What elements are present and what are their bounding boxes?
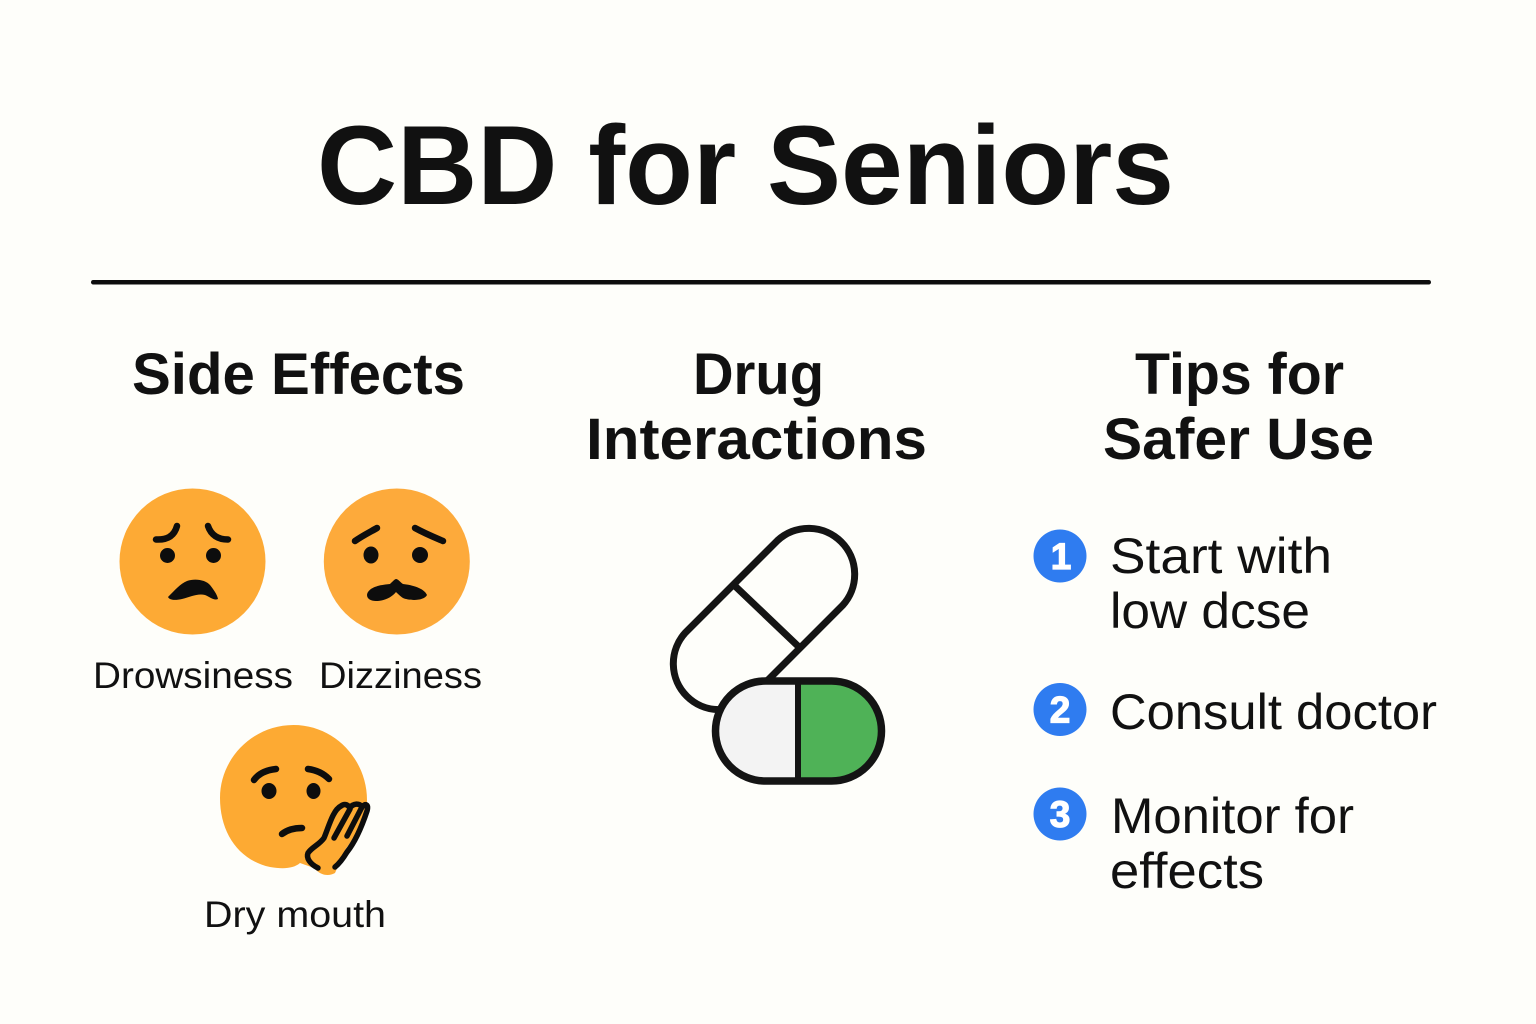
tip 3 badge xyxy=(1034,788,1086,840)
icon: green and white capsule xyxy=(716,680,882,782)
tip 2 text: Consult doctor xyxy=(1110,684,1437,740)
icon: dry mouth face with hand xyxy=(220,725,368,875)
tip 2 badge xyxy=(1034,683,1086,736)
panel: side effects xyxy=(93,342,482,935)
label: dizziness: Dizziness xyxy=(319,655,482,696)
tip 3 text: effects xyxy=(1110,843,1264,899)
icon: drowsiness face xyxy=(120,488,266,634)
tip 3 badge: 3 xyxy=(1050,794,1070,835)
tip 1 badge: 1 xyxy=(1051,536,1071,577)
icon: outlined capsule xyxy=(673,528,855,710)
label: drowsiness: Drowsiness xyxy=(93,655,293,696)
tip 3 text: Monitor for xyxy=(1111,788,1354,844)
tip 1 text: Start with xyxy=(1110,528,1332,584)
tip 2 badge: 2 xyxy=(1050,690,1070,730)
title: CBD for Seniors xyxy=(317,103,1174,228)
panel: tips for safer use xyxy=(1034,342,1437,899)
heading: tips for safer use: Tips for xyxy=(1135,342,1344,407)
label: dry mouth: Dry mouth xyxy=(204,894,386,935)
heading: tips for safer use: Safer Use xyxy=(1103,407,1374,472)
heading: drug interactions: Drug xyxy=(693,342,824,407)
heading: side effects: Side Effects xyxy=(132,342,465,407)
panel: drug interactions xyxy=(586,342,927,782)
tip 1 text: low dcse xyxy=(1110,583,1310,639)
icon: dizziness face xyxy=(324,488,470,634)
heading: drug interactions: Interactions xyxy=(586,407,927,472)
tip 1 badge xyxy=(1034,530,1086,582)
